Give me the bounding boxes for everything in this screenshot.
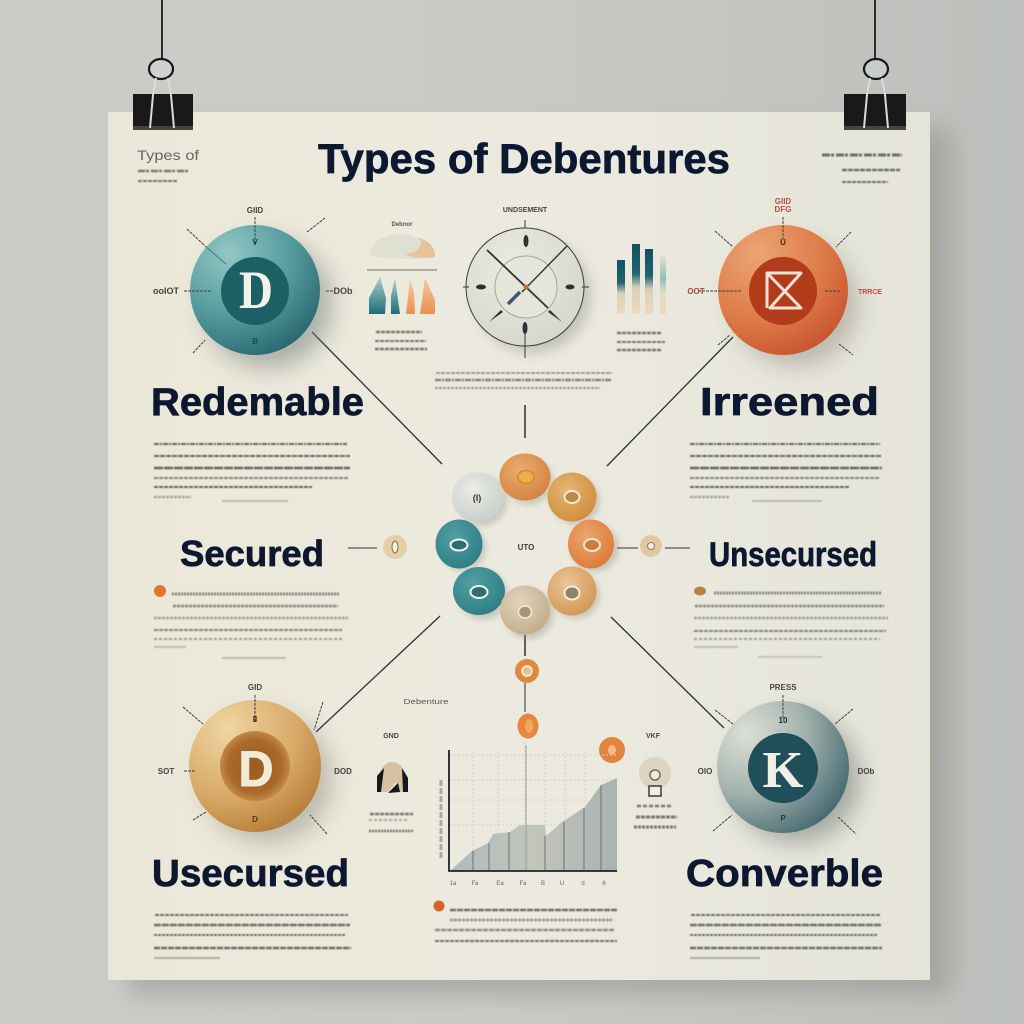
- disc: unsecured: II: [253, 715, 257, 724]
- title: Types of Debentures: [318, 135, 730, 182]
- heading: secured: Secured: [180, 533, 324, 574]
- area chart: d: [581, 881, 585, 887]
- ring centre label: UTO: [518, 543, 534, 552]
- disc: redeemable: ooIOT: [153, 286, 179, 296]
- area chart: 1a: [450, 881, 457, 887]
- top-left note: Types of: [137, 147, 199, 163]
- pebble: right orange: [568, 520, 614, 568]
- top-right note: [822, 155, 902, 182]
- heading: irredeemable: Irreened: [700, 381, 879, 424]
- side dot: secured: [383, 535, 407, 559]
- small icon: right of chart: VKF: [646, 733, 661, 740]
- heading: unsecured lower: Usecursed: [152, 853, 349, 895]
- label above chart: Debenture: [404, 699, 449, 706]
- disc: redeemable: [153, 206, 353, 368]
- infographic: small charts, left: Debnor: [392, 222, 413, 228]
- area chart: Fa: [471, 881, 479, 887]
- small icon: left of chart: GND: [383, 733, 399, 740]
- pebble: upper teal: [436, 520, 482, 568]
- text block: convertible: [690, 915, 882, 958]
- pebble ring: [436, 454, 619, 639]
- text block: irredeemable: [690, 444, 882, 501]
- disc: unsecured: GID: [248, 683, 262, 692]
- area chart: Fa: [519, 881, 527, 887]
- disc: convertible: DOb: [858, 767, 875, 776]
- area chart: [441, 742, 617, 887]
- letter K: K: [762, 742, 804, 799]
- mini bar chart: right: [617, 244, 666, 350]
- pebble: gold: [548, 472, 596, 522]
- disc: unsecured: D: [252, 815, 258, 824]
- area series: [451, 778, 617, 871]
- side dot: unsecured: [640, 535, 662, 557]
- axes: [449, 750, 617, 871]
- area chart: U: [560, 881, 564, 887]
- area chart: B: [541, 881, 545, 887]
- text block: unsecured: [694, 593, 888, 657]
- disc: convertible: 10: [779, 716, 788, 725]
- disc: convertible: P: [780, 814, 786, 823]
- disc: irredeemable: [687, 197, 882, 366]
- disc: irredeemable: U: [780, 238, 786, 247]
- top-left note: [137, 147, 199, 181]
- area chart: Ea: [496, 881, 504, 887]
- poster shadow: [128, 128, 952, 994]
- clock dial: [463, 207, 591, 358]
- pebble: top orange: [500, 454, 550, 500]
- pebble: lower teal: [453, 567, 505, 615]
- letter D: D: [239, 260, 273, 320]
- disc: unsecured: SOT: [158, 767, 174, 776]
- infographic: small charts, left: [367, 222, 437, 349]
- disc: redeemable: DOb: [334, 286, 353, 296]
- letter D: D: [238, 741, 274, 797]
- text block: centre top: [435, 373, 612, 388]
- pebble: white: [452, 472, 504, 522]
- text block: chart caption: [434, 900, 617, 941]
- area chart: 6: [602, 881, 606, 887]
- connector lines to centre: [312, 332, 733, 732]
- text block: secured: [154, 594, 348, 658]
- disc: convertible: [698, 683, 875, 843]
- margin note: [127, 912, 131, 965]
- hourglass glyph: [767, 273, 801, 308]
- heading: convertible: Converble: [686, 853, 883, 895]
- disc: irredeemable: GIID: [775, 197, 791, 206]
- disc: redeemable: V: [252, 238, 258, 247]
- heading: unsecured: Unsecursed: [709, 536, 877, 574]
- disc: irredeemable: TRRCE: [858, 289, 882, 296]
- small icon: right of chart: [634, 733, 677, 827]
- disc: unsecured: [158, 683, 352, 843]
- heading: redeemable: Redemable: [151, 381, 364, 424]
- small orange nodes: [515, 659, 625, 763]
- clock dial: UNDSEMENT: [503, 207, 548, 214]
- pebble: tan: [548, 566, 596, 616]
- small icon: left of chart: [369, 733, 413, 831]
- text block: unsecured lower: [154, 915, 351, 958]
- pebble: white: (I): [473, 493, 481, 503]
- disc: unsecured: DOD: [334, 767, 352, 776]
- disc: redeemable: B: [252, 337, 258, 346]
- bullet: unsecured text: [694, 586, 706, 596]
- disc: irredeemable: DFG: [775, 205, 791, 214]
- bullet: secured text: [154, 585, 166, 597]
- pebble: beige: [500, 586, 550, 634]
- disc: convertible: OIO: [698, 767, 712, 776]
- disc: convertible: PRESS: [769, 683, 797, 692]
- disc: redeemable: GIID: [247, 206, 263, 215]
- disc: irredeemable: OOT: [687, 287, 705, 296]
- hanging clip: left: [133, 0, 193, 130]
- text block: redeemable: [154, 444, 350, 501]
- hanging clip: right: [844, 0, 906, 130]
- poster sheet: [108, 112, 930, 980]
